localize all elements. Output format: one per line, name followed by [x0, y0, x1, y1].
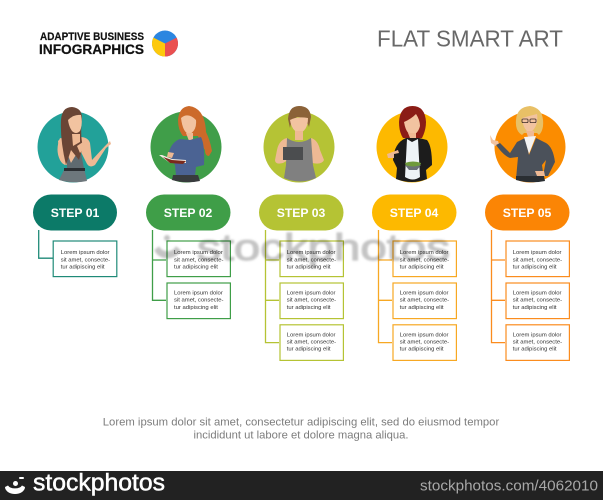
step pill [485, 194, 570, 230]
text box [280, 283, 343, 319]
text box: Lorem ipsum dolor [287, 250, 336, 256]
image reference url: stockphotos.com/4062010 [420, 478, 598, 494]
text box: tur adipiscing elit [400, 347, 444, 353]
connector lines [152, 230, 166, 300]
footer text: Lorem ipsum dolor sit amet, consectetur adipiscing elit, sed do eiusmod tempor [103, 416, 499, 428]
watermark [155, 227, 450, 268]
step pill: STEP 04 [390, 206, 438, 220]
icon: stock logo smile [5, 477, 25, 494]
text box [393, 325, 456, 360]
step 5 column [485, 194, 570, 360]
text box: sit amet, consecte- [513, 298, 562, 304]
watermark: stockphotos [197, 227, 450, 268]
icon: tri-colour pie [152, 30, 178, 57]
text box: tur adipiscing elit [400, 305, 444, 311]
step 2 column [146, 194, 230, 319]
text box: Lorem ipsum dolor [174, 290, 223, 296]
brand wordmark: stockphotos [33, 470, 165, 496]
text box: Lorem ipsum dolor [400, 250, 449, 256]
text box [506, 325, 569, 360]
portrait 2: woman with notebook on green circle [150, 106, 222, 182]
text box: Lorem ipsum dolor [287, 290, 336, 296]
step 4 column [372, 194, 456, 360]
text box: Lorem ipsum dolor [287, 332, 336, 338]
text box [506, 283, 569, 319]
step pill: STEP 03 [277, 206, 325, 220]
bottom credit bar [0, 470, 603, 500]
text box: Lorem ipsum dolor [174, 250, 223, 256]
text box: sit amet, consecte- [513, 340, 562, 346]
text box: sit amet, consecte- [287, 298, 336, 304]
text box: tur adipiscing elit [513, 347, 557, 353]
text box: Lorem ipsum dolor [400, 290, 449, 296]
step 3 column [259, 194, 344, 360]
title: FLAT SMART ART [377, 26, 563, 52]
connector lines [39, 230, 53, 258]
step pill: STEP 01 [51, 206, 99, 220]
text box: tur adipiscing elit [287, 265, 331, 271]
portrait 4: woman with salad on yellow circle [376, 106, 448, 182]
connector lines [378, 230, 392, 343]
text box [280, 241, 343, 277]
text box: Lorem ipsum dolor [513, 332, 562, 338]
step 1 column [33, 194, 117, 277]
text box [167, 241, 230, 277]
footer text: incididunt ut labore et dolore magna aliqua. [194, 430, 408, 442]
text box: Lorem ipsum dolor [513, 250, 562, 256]
text box: Lorem ipsum dolor [513, 290, 562, 296]
brand name: ADAPTIVE BUSINESS [40, 31, 144, 43]
step pill: STEP 05 [503, 206, 551, 220]
text box: tur adipiscing elit [513, 305, 557, 311]
text box [393, 241, 456, 277]
text box: tur adipiscing elit [400, 265, 444, 271]
portrait 1: woman pointing on teal circle [38, 107, 111, 182]
text box: Lorem ipsum dolor [61, 250, 110, 256]
text box [280, 325, 343, 360]
footer text [103, 416, 499, 442]
text box: tur adipiscing elit [287, 305, 331, 311]
text box [167, 283, 230, 319]
text box: sit amet, consecte- [400, 298, 449, 304]
brand logo [39, 30, 178, 58]
step pill [372, 194, 456, 230]
text box: sit amet, consecte- [174, 298, 223, 304]
brand name [39, 31, 144, 58]
text box: tur adipiscing elit [61, 265, 105, 271]
text box: sit amet, consecte- [287, 257, 336, 263]
text box [506, 241, 569, 277]
text box: sit amet, consecte- [400, 257, 449, 263]
text box: sit amet, consecte- [287, 340, 336, 346]
connector lines [492, 230, 505, 343]
portrait 5: businesswoman on orange circle [490, 106, 566, 182]
text box [393, 283, 456, 319]
text box: tur adipiscing elit [287, 347, 331, 353]
text box: tur adipiscing elit [174, 305, 218, 311]
text box: sit amet, consecte- [61, 257, 110, 263]
text box: tur adipiscing elit [513, 265, 557, 271]
text box: sit amet, consecte- [513, 257, 562, 263]
step pill: STEP 02 [164, 206, 212, 220]
step pill [259, 194, 344, 230]
portrait 3: woman with tablet on lime circle [264, 106, 334, 182]
text box: Lorem ipsum dolor [400, 332, 449, 338]
text box: sit amet, consecte- [174, 257, 223, 263]
text box: sit amet, consecte- [400, 340, 449, 346]
connector lines [266, 230, 279, 343]
text box [53, 241, 117, 277]
brand name: INFOGRAPHICS [39, 42, 144, 58]
text box: tur adipiscing elit [174, 265, 218, 271]
